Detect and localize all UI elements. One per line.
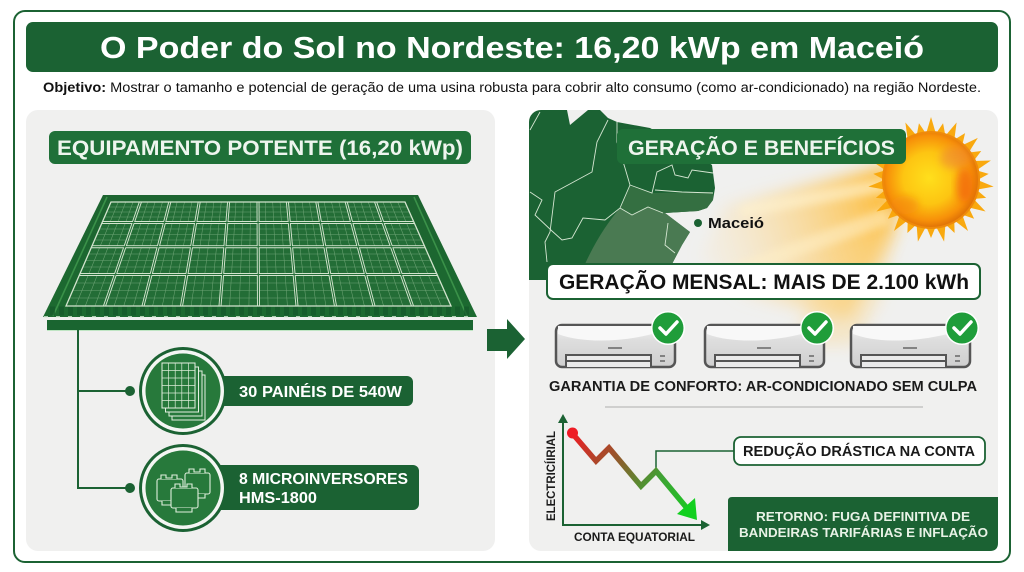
comfort caption: GARANTIA DE CONFORTO: AR-CONDICIONADO SEM CULPA: [549, 379, 978, 395]
map: Northeast Brazil: [529, 110, 715, 280]
callout: drastic reduction: [734, 437, 985, 465]
icon: microinverters: [139, 444, 227, 532]
objective text: Objetivo: Mostrar o tamanho e potencial de geração de uma usina robusta para cobrir alto consumo (como ar-condicionado) na região Nordeste.: [43, 80, 981, 95]
heading: equipment: EQUIPAMENTO POTENTE (16,20 kWp): [57, 137, 463, 160]
label: microinverters: 8 MICROINVERSORES: [239, 471, 408, 488]
panel frames: [80, 202, 437, 306]
chart: bill reduction: CONTA EQUATORIAL: [574, 532, 695, 544]
callout: return: BANDEIRAS TARIFÁRIAS E INFLAÇÃO: [739, 525, 988, 540]
callout: monthly generation: GERAÇÃO MENSAL: MAIS DE 2.100 kWh: [559, 269, 969, 294]
sun rays: [700, 165, 900, 345]
icon: panels stack: [139, 347, 227, 435]
callout: return: [728, 497, 998, 551]
heading: generation: [617, 129, 906, 164]
heading: equipment: [49, 131, 471, 164]
label: panels: [205, 376, 413, 406]
label: panels: 30 PAINÉIS DE 540W: [239, 382, 403, 401]
icon: air conditioner 3: [851, 311, 979, 367]
chart: bill reduction: [545, 414, 734, 544]
label: microinverters: [205, 465, 419, 510]
icon: air conditioner 1: [556, 311, 685, 367]
connector lines: [78, 330, 130, 488]
icon: sun: [868, 117, 994, 243]
callout: monthly generation: [547, 264, 980, 299]
icon: air conditioner 2: [705, 311, 834, 367]
fine grid: [70, 202, 448, 306]
chart: bill reduction: ELECTRICÍIRIAL: [545, 431, 558, 521]
heading: generation: GERAÇÃO E BENEFÍCIOS: [628, 137, 895, 160]
title bar: O Poder do Sol no Nordeste: 16,20 kWp em Maceió: [100, 30, 924, 65]
callout: return: RETORNO: FUGA DEFINITIVA DE: [756, 509, 970, 524]
illustration: solar roof: [43, 195, 477, 330]
title bar: [26, 22, 998, 72]
panel: equipment: [26, 110, 495, 551]
map marker: Maceió: Maceió: [708, 215, 764, 232]
arrow: panel connection: [487, 319, 525, 359]
panel: generation and benefits: [529, 110, 998, 551]
label: microinverters: HMS-1800: [239, 490, 317, 507]
callout: drastic reduction: REDUÇÃO DRÁSTICA NA CONTA: [743, 442, 976, 460]
